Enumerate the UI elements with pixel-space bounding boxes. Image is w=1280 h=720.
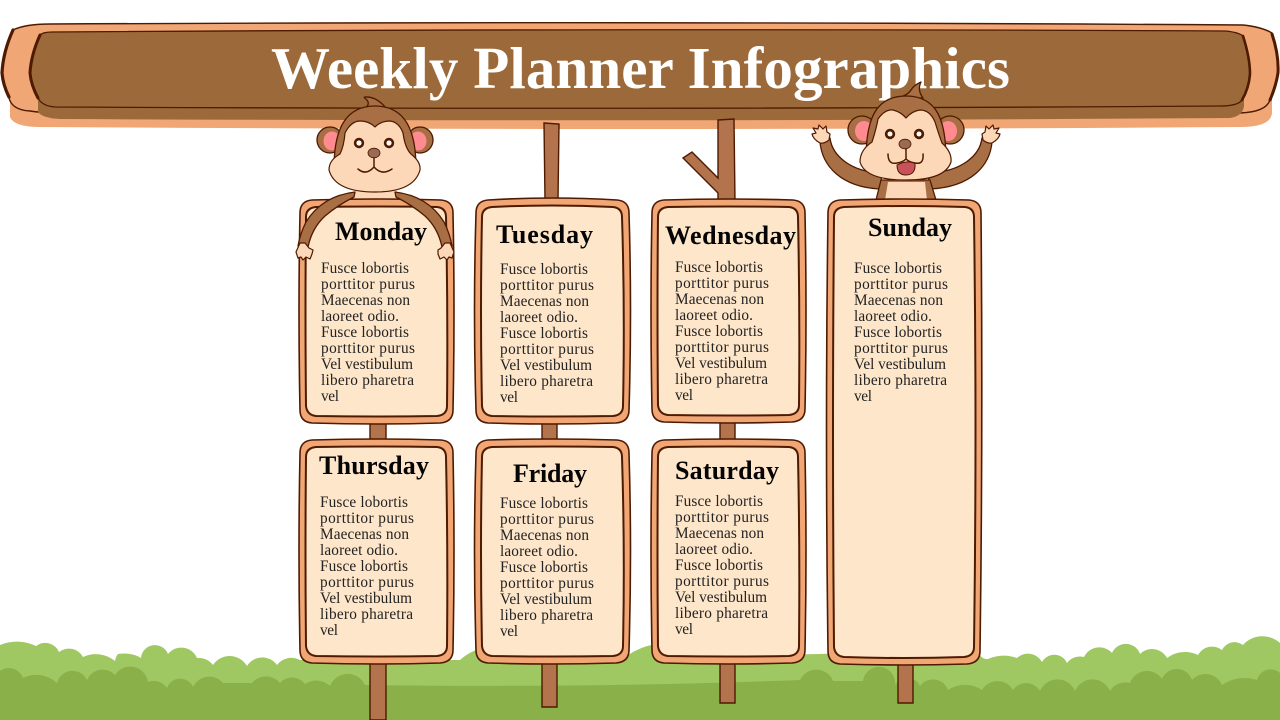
Wednesday text: Vel vestibulum <box>675 355 767 372</box>
banner plank right stroke <box>1242 36 1250 100</box>
Thursday text <box>320 494 414 639</box>
eye right highlight <box>916 132 922 136</box>
head <box>334 106 416 168</box>
Wednesday text: laoreet odio. <box>675 307 753 324</box>
Monday text: Fusce lobortis <box>321 324 409 341</box>
Tuesday text: laoreet odio. <box>500 309 578 326</box>
left ear <box>848 116 876 144</box>
Sunday text: porttitor purus <box>854 340 948 357</box>
Sunday text: Fusce lobortis <box>854 324 942 341</box>
Monday text: Fusce lobortis <box>321 260 409 277</box>
Wednesday text: Maecenas non <box>675 291 764 308</box>
Wednesday heading: Wednesday <box>665 221 796 250</box>
left arm <box>820 138 882 189</box>
Friday text: Maecenas non <box>500 527 589 544</box>
Sunday frame <box>826 199 982 665</box>
Sunday text <box>854 260 948 405</box>
Monday frame <box>299 199 454 424</box>
monkey: waving above Sunday <box>812 82 1000 200</box>
Tuesday frame <box>474 198 630 424</box>
Wednesday text: porttitor purus <box>675 275 769 292</box>
Sunday text: Maecenas non <box>854 292 943 309</box>
Wednesday text <box>675 259 769 404</box>
Thursday text: vel <box>320 622 338 639</box>
eye left highlight <box>888 132 892 136</box>
banner plank <box>30 30 1250 108</box>
Tuesday lower post <box>542 420 557 707</box>
Tuesday text: Vel vestibulum <box>500 357 592 374</box>
Saturday frame <box>651 439 806 664</box>
Tuesday text: libero pharetra <box>500 373 593 390</box>
board: Wednesday <box>651 199 806 423</box>
Wednesday panel <box>658 206 799 416</box>
Wednesday text: Fusce lobortis <box>675 323 763 340</box>
Thursday frame <box>299 439 454 664</box>
Sunday text: vel <box>854 388 872 405</box>
tuft <box>898 82 923 98</box>
Thursday text: Maecenas non <box>320 526 409 543</box>
Tuesday panel <box>481 206 624 416</box>
banner plank left stroke <box>30 35 40 98</box>
left hand <box>296 243 313 260</box>
Saturday text: Fusce lobortis <box>675 557 763 574</box>
monkey head over Monday <box>317 97 433 202</box>
Monday heading: Monday <box>335 217 427 246</box>
Saturday text: porttitor purus <box>675 509 769 526</box>
face <box>329 121 420 192</box>
Thursday text: libero pharetra <box>320 606 413 623</box>
Thursday heading: Thursday <box>319 451 429 480</box>
Tuesday text: Maecenas non <box>500 293 589 310</box>
banner left edge stroke <box>2 30 13 97</box>
eye left highlight <box>356 140 362 146</box>
Sunday text: laoreet odio. <box>854 308 932 325</box>
Friday frame <box>474 439 630 664</box>
neck <box>354 188 397 202</box>
Monday text <box>321 260 415 405</box>
title: Weekly Planner Infographics <box>271 35 1010 101</box>
Wednesday text: libero pharetra <box>675 371 768 388</box>
Wednesday lower post <box>720 420 735 703</box>
left inner ear <box>855 121 873 141</box>
Monday text: Vel vestibulum <box>321 356 413 373</box>
Tuesday text: Fusce lobortis <box>500 325 588 342</box>
face <box>860 110 951 180</box>
Monday panel <box>306 206 447 416</box>
eye right <box>384 138 394 148</box>
Sunday text: Vel vestibulum <box>854 356 946 373</box>
Thursday text: laoreet odio. <box>320 542 398 559</box>
banner outer frame <box>1 23 1279 115</box>
Saturday text: porttitor purus <box>675 573 769 590</box>
board: Thursday <box>299 439 454 664</box>
mouth opening <box>897 162 915 175</box>
Sunday text: Fusce lobortis <box>854 260 942 277</box>
banner outer outline <box>9 23 1272 115</box>
Sunday text: libero pharetra <box>854 372 947 389</box>
right inner ear <box>939 121 957 141</box>
Monday text: porttitor purus <box>321 340 415 357</box>
Wednesday frame <box>651 199 806 423</box>
ground: dark green bushes <box>0 667 1280 720</box>
Friday text: Fusce lobortis <box>500 495 588 512</box>
inner ear left <box>324 132 340 150</box>
Monday text: laoreet odio. <box>321 308 399 325</box>
board: Friday <box>474 439 630 664</box>
right hand <box>982 125 1000 143</box>
Friday text: Fusce lobortis <box>500 559 588 576</box>
nose <box>899 139 911 149</box>
Wednesday text: porttitor purus <box>675 339 769 356</box>
Monday text: libero pharetra <box>321 372 414 389</box>
Sunday text: porttitor purus <box>854 276 948 293</box>
Thursday text: Fusce lobortis <box>320 494 408 511</box>
banner shadow <box>10 90 1272 129</box>
Saturday text: Fusce lobortis <box>675 493 763 510</box>
Friday text <box>500 495 594 640</box>
board: Saturday <box>651 439 806 664</box>
Thursday panel <box>306 446 447 656</box>
ear right <box>407 127 433 153</box>
right ear <box>936 116 964 144</box>
eye right <box>914 129 924 139</box>
tuft <box>364 97 386 108</box>
Monday text: porttitor purus <box>321 276 415 293</box>
Wednesday upper post with branch <box>683 119 735 202</box>
banner plank outline <box>38 30 1243 108</box>
left hand <box>812 125 830 143</box>
Tuesday text: vel <box>500 389 518 406</box>
chest <box>885 182 927 200</box>
eye right highlight <box>386 140 392 146</box>
Thursday text: porttitor purus <box>320 574 414 591</box>
Saturday text: vel <box>675 621 693 638</box>
Saturday text: laoreet odio. <box>675 541 753 558</box>
Sunday post <box>898 660 913 703</box>
Sunday heading: Sunday <box>868 213 952 242</box>
nose <box>368 148 380 158</box>
Tuesday heading: Tuesday <box>496 220 593 249</box>
banner plank shadow <box>38 95 1244 120</box>
Thursday text: Fusce lobortis <box>320 558 408 575</box>
Wednesday text: Fusce lobortis <box>675 259 763 276</box>
Tuesday text: porttitor purus <box>500 277 594 294</box>
Tuesday text: porttitor purus <box>500 341 594 358</box>
Monday post <box>370 420 386 720</box>
ground: light green bushes <box>0 636 1280 720</box>
board: Monday <box>299 199 454 424</box>
Monday text: vel <box>321 388 339 405</box>
head <box>866 96 946 160</box>
inner ear right <box>410 132 426 150</box>
Sunday panel <box>833 206 976 658</box>
Saturday text: libero pharetra <box>675 605 768 622</box>
board: Sunday <box>826 199 982 665</box>
Thursday text: Vel vestibulum <box>320 590 412 607</box>
Saturday heading: Saturday <box>675 456 779 485</box>
Tuesday text <box>500 261 594 406</box>
banner right edge stroke <box>1270 34 1278 100</box>
Friday text: libero pharetra <box>500 607 593 624</box>
banner: wooden sign <box>1 23 1279 129</box>
Friday text: laoreet odio. <box>500 543 578 560</box>
Tuesday text: Fusce lobortis <box>500 261 588 278</box>
Saturday text: Maecenas non <box>675 525 764 542</box>
Friday text: vel <box>500 623 518 640</box>
left arm <box>298 192 355 247</box>
Friday text: porttitor purus <box>500 511 594 528</box>
body <box>876 180 936 200</box>
Friday heading: Friday <box>513 459 587 488</box>
posts behind the boards <box>370 119 913 720</box>
Thursday text: porttitor purus <box>320 510 414 527</box>
eye left <box>354 138 364 148</box>
right arm <box>395 192 452 247</box>
Monday text: Maecenas non <box>321 292 410 309</box>
right hand <box>438 243 454 260</box>
Saturday text <box>675 493 769 638</box>
Wednesday text: vel <box>675 387 693 404</box>
Friday text: porttitor purus <box>500 575 594 592</box>
Saturday text: Vel vestibulum <box>675 589 767 606</box>
eye left <box>885 129 895 139</box>
Friday text: Vel vestibulum <box>500 591 592 608</box>
Friday panel <box>481 446 624 656</box>
Saturday panel <box>658 446 799 656</box>
right arm <box>928 138 992 189</box>
smile <box>888 149 923 163</box>
Tuesday upper post <box>544 123 559 200</box>
board: Tuesday <box>474 198 630 424</box>
smile <box>358 158 392 172</box>
monkey arms hugging Monday board <box>296 192 454 260</box>
ear left <box>317 127 343 153</box>
